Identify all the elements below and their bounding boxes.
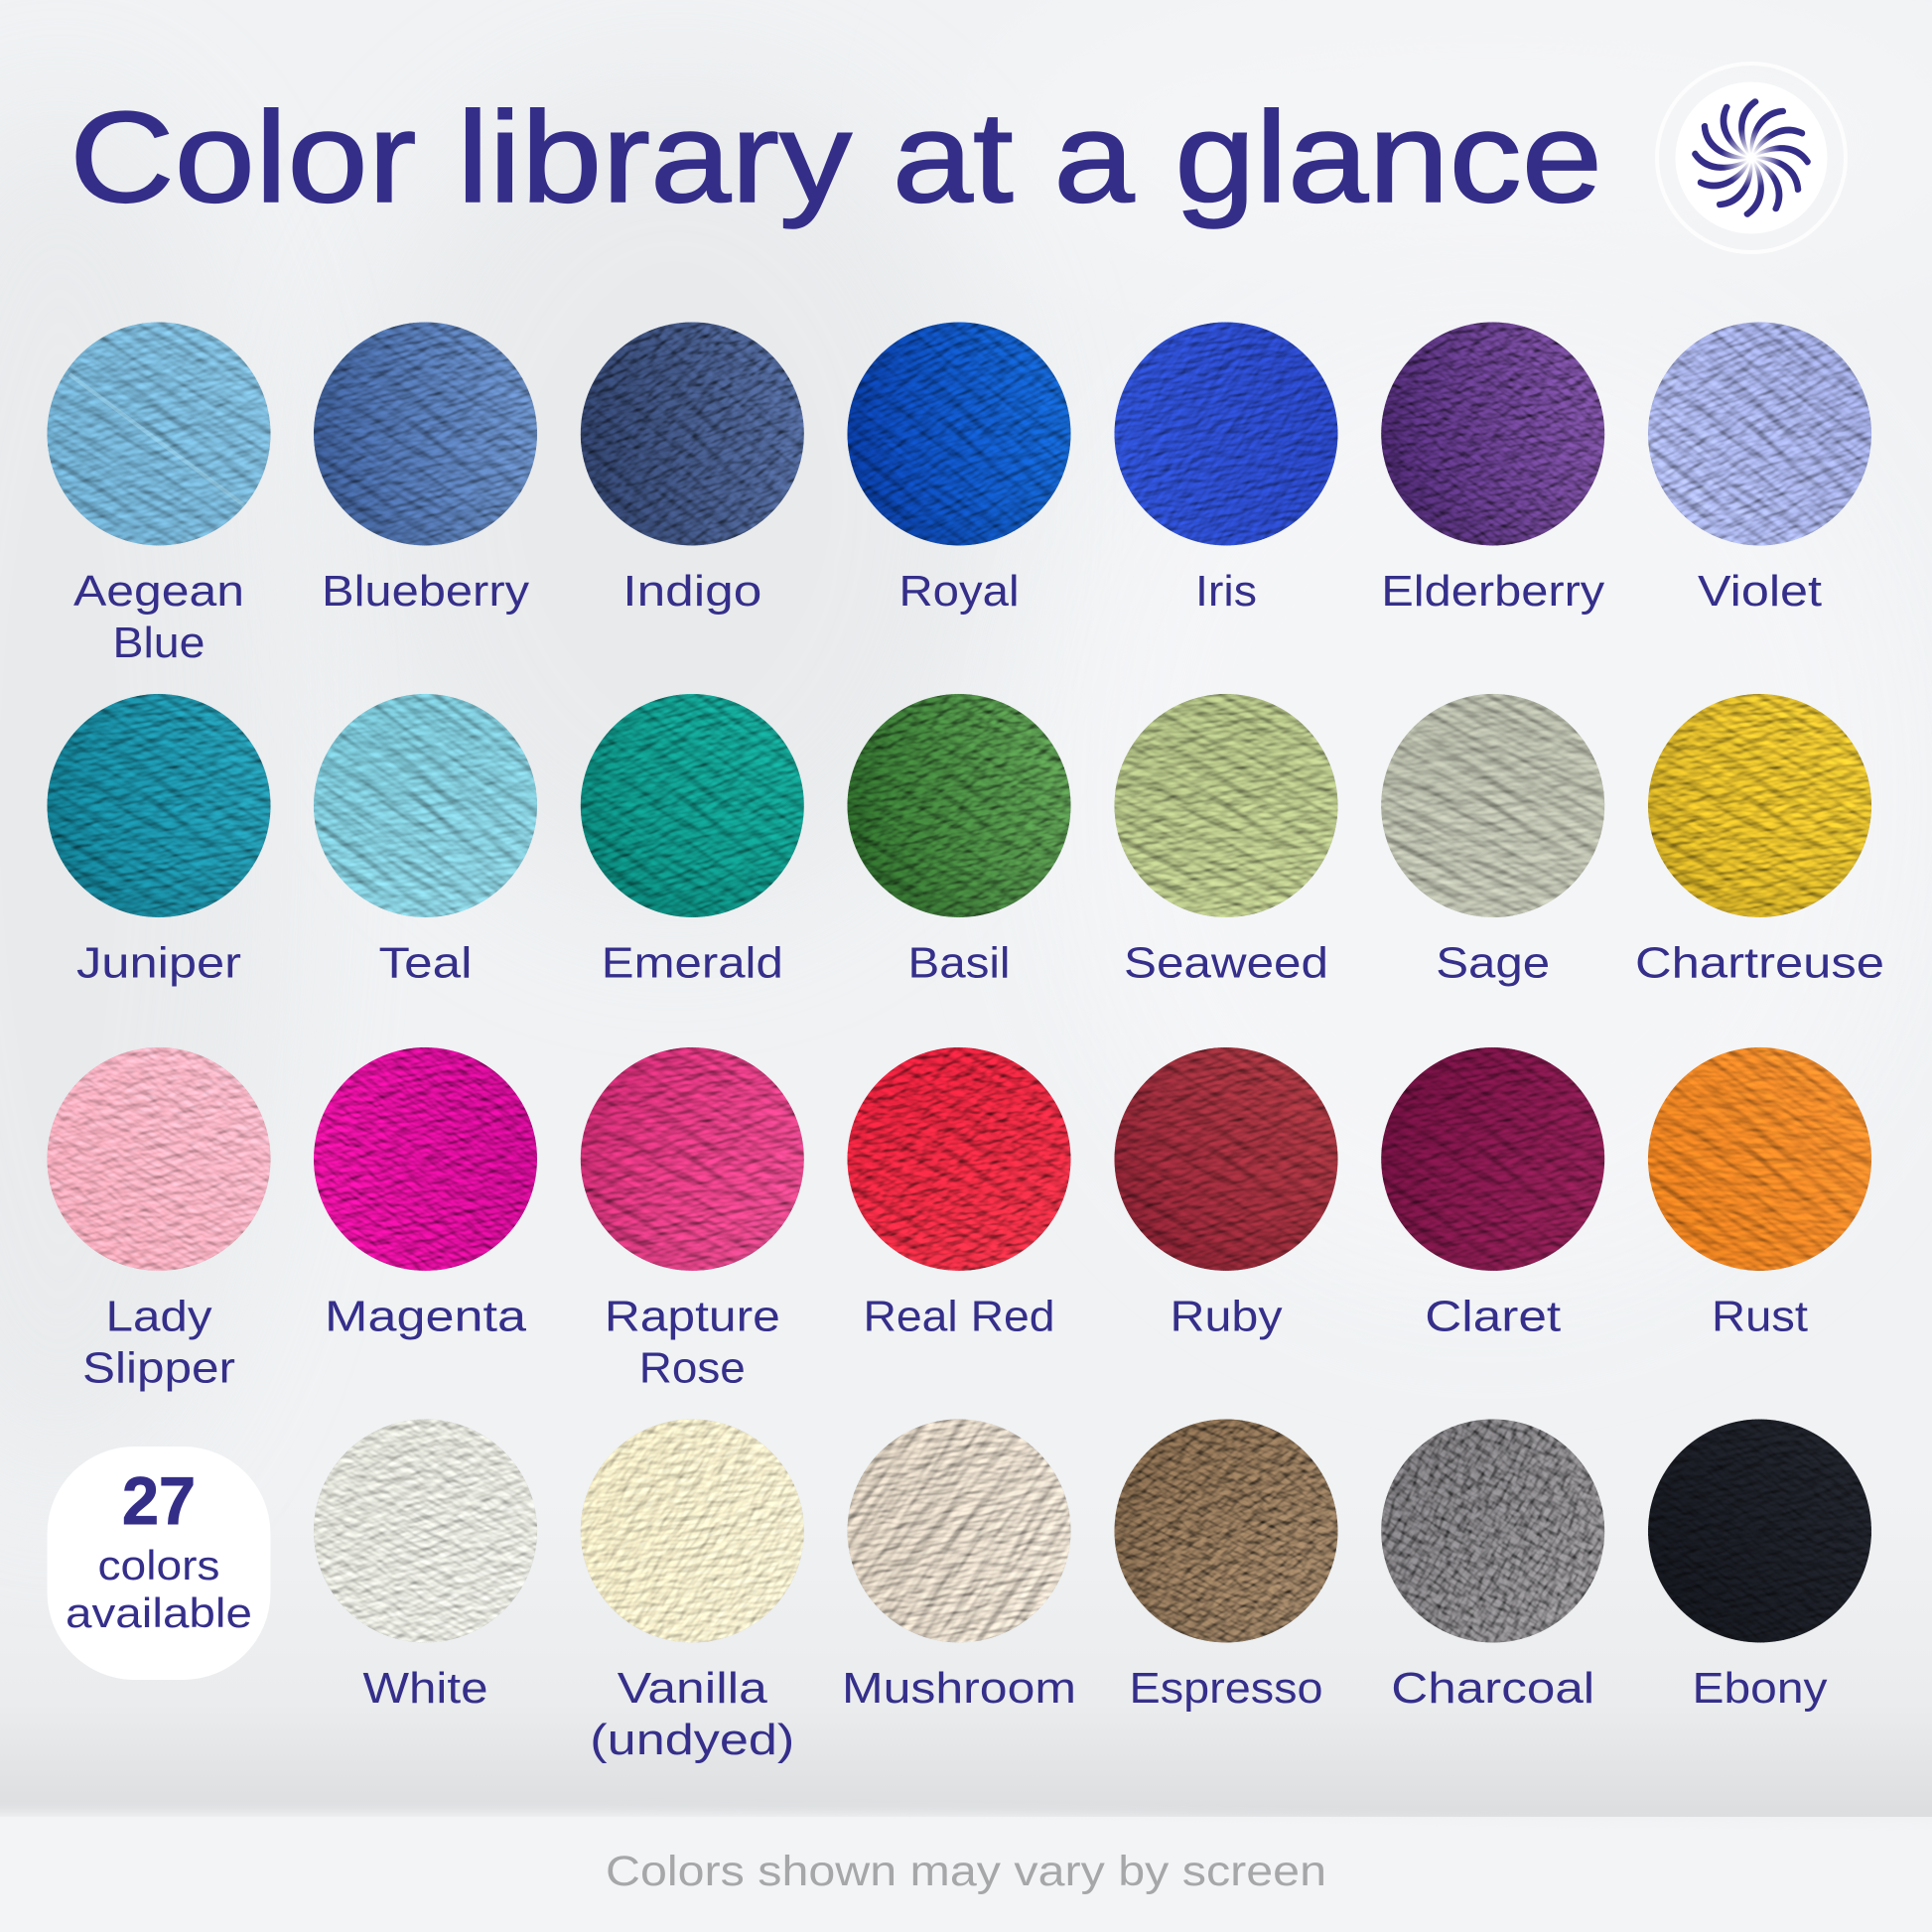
label: Vanilla [618, 1664, 767, 1713]
yarn texture [6, 1007, 312, 1311]
yarn texture [802, 277, 1116, 591]
swatch: Charcoal [1337, 1375, 1649, 1713]
label: White [363, 1664, 488, 1713]
yarn texture [535, 276, 850, 592]
swatch: Sage [1341, 654, 1644, 987]
label: Sage [1436, 939, 1550, 987]
yarn texture [537, 650, 848, 961]
swatch: Claret [1337, 1004, 1648, 1340]
swatch: Indigo [535, 276, 850, 616]
yarn texture [805, 651, 1113, 960]
swatch: Basil [805, 651, 1113, 987]
label: Juniper [76, 939, 241, 987]
footnote: Colors shown may vary by screen [606, 1848, 1326, 1895]
swatch: Elderberry [1337, 278, 1649, 616]
callout number: 27 [122, 1463, 196, 1539]
swatch: Teal [269, 649, 582, 987]
callout text line 2: available [66, 1589, 252, 1636]
label: Rapture [605, 1293, 780, 1340]
label: Seaweed [1124, 939, 1328, 987]
label: Basil [907, 939, 1011, 987]
yarn texture [1607, 653, 1912, 958]
label line 2: Blue [113, 619, 205, 667]
label: Charcoal [1391, 1664, 1594, 1713]
label: Claret [1425, 1293, 1561, 1340]
yarn texture [1337, 1375, 1649, 1687]
label: Magenta [325, 1293, 527, 1340]
yarn texture [1337, 278, 1649, 590]
swatch: Juniper [5, 651, 313, 987]
yarn texture [806, 1007, 1112, 1311]
swatch: Mushroom [803, 1375, 1115, 1713]
swatch: Emerald [537, 650, 848, 987]
label: Teal [379, 939, 472, 987]
yarn texture [270, 279, 581, 589]
label: Iris [1195, 567, 1257, 616]
yarn texture [1603, 1003, 1916, 1315]
swatch: Violet [1602, 277, 1917, 616]
swatch: Aegean Blue [48, 322, 270, 657]
yarn texture [1604, 1375, 1915, 1687]
label: Indigo [622, 567, 761, 616]
label line 2: Slipper [82, 1344, 235, 1392]
swatch: Real Red [806, 1007, 1112, 1340]
yarn texture [1075, 654, 1377, 957]
swatch: Rust [1603, 1003, 1916, 1340]
label: Ruby [1171, 1293, 1282, 1340]
label: Royal [899, 567, 1019, 616]
yarn texture [274, 1380, 577, 1682]
label: Espresso [1130, 1664, 1322, 1713]
label: Blueberry [322, 567, 529, 616]
yarn texture [1068, 276, 1384, 592]
label: Rust [1712, 1293, 1808, 1340]
swatch: Royal [802, 277, 1116, 616]
swatch: Lady Slipper [6, 1007, 312, 1392]
swatch: Ruby [1073, 1007, 1379, 1340]
swatch: White [274, 1380, 577, 1713]
label: Aegean [73, 567, 244, 616]
label: Chartreuse [1635, 939, 1884, 987]
swatch: Blueberry [314, 322, 537, 615]
yarn texture [1077, 1382, 1375, 1680]
label: Real Red [864, 1293, 1054, 1340]
label: Ebony [1692, 1664, 1827, 1713]
swatch: Seaweed [1075, 654, 1377, 987]
label: Mushroom [842, 1664, 1076, 1713]
label line 2: (undyed) [590, 1716, 794, 1764]
swatch: Magenta [271, 1005, 580, 1340]
label: Emerald [602, 939, 783, 987]
swatch: Vanilla (undyed) [535, 1374, 849, 1764]
swatch: Iris [1068, 276, 1384, 616]
label: Violet [1698, 567, 1822, 616]
callout text line 1: colors [97, 1542, 220, 1588]
yarn texture [803, 1375, 1115, 1687]
yarn texture [1341, 654, 1644, 957]
yarn texture [1602, 277, 1917, 591]
yarn texture [271, 1005, 580, 1313]
yarn texture [5, 651, 313, 960]
yarn texture [1337, 1004, 1648, 1314]
swatch: Chartreuse [1607, 653, 1912, 987]
callout: 27 colors available [48, 1447, 270, 1680]
yarn texture [1073, 1007, 1379, 1311]
yarn texture [48, 322, 270, 546]
swatch: Rapture Rose [539, 1007, 845, 1392]
label: Lady [105, 1293, 212, 1340]
icon: brand swirl logo in white circle [1657, 64, 1846, 252]
label: Elderberry [1381, 567, 1604, 616]
yarn texture [269, 649, 582, 962]
swatch: Espresso [1077, 1382, 1375, 1713]
yarn texture [535, 1374, 849, 1688]
title: Color library at a glance [69, 84, 1602, 229]
yarn texture [539, 1007, 845, 1311]
label line 2: Rose [639, 1344, 746, 1392]
swatch: Ebony [1604, 1375, 1915, 1713]
